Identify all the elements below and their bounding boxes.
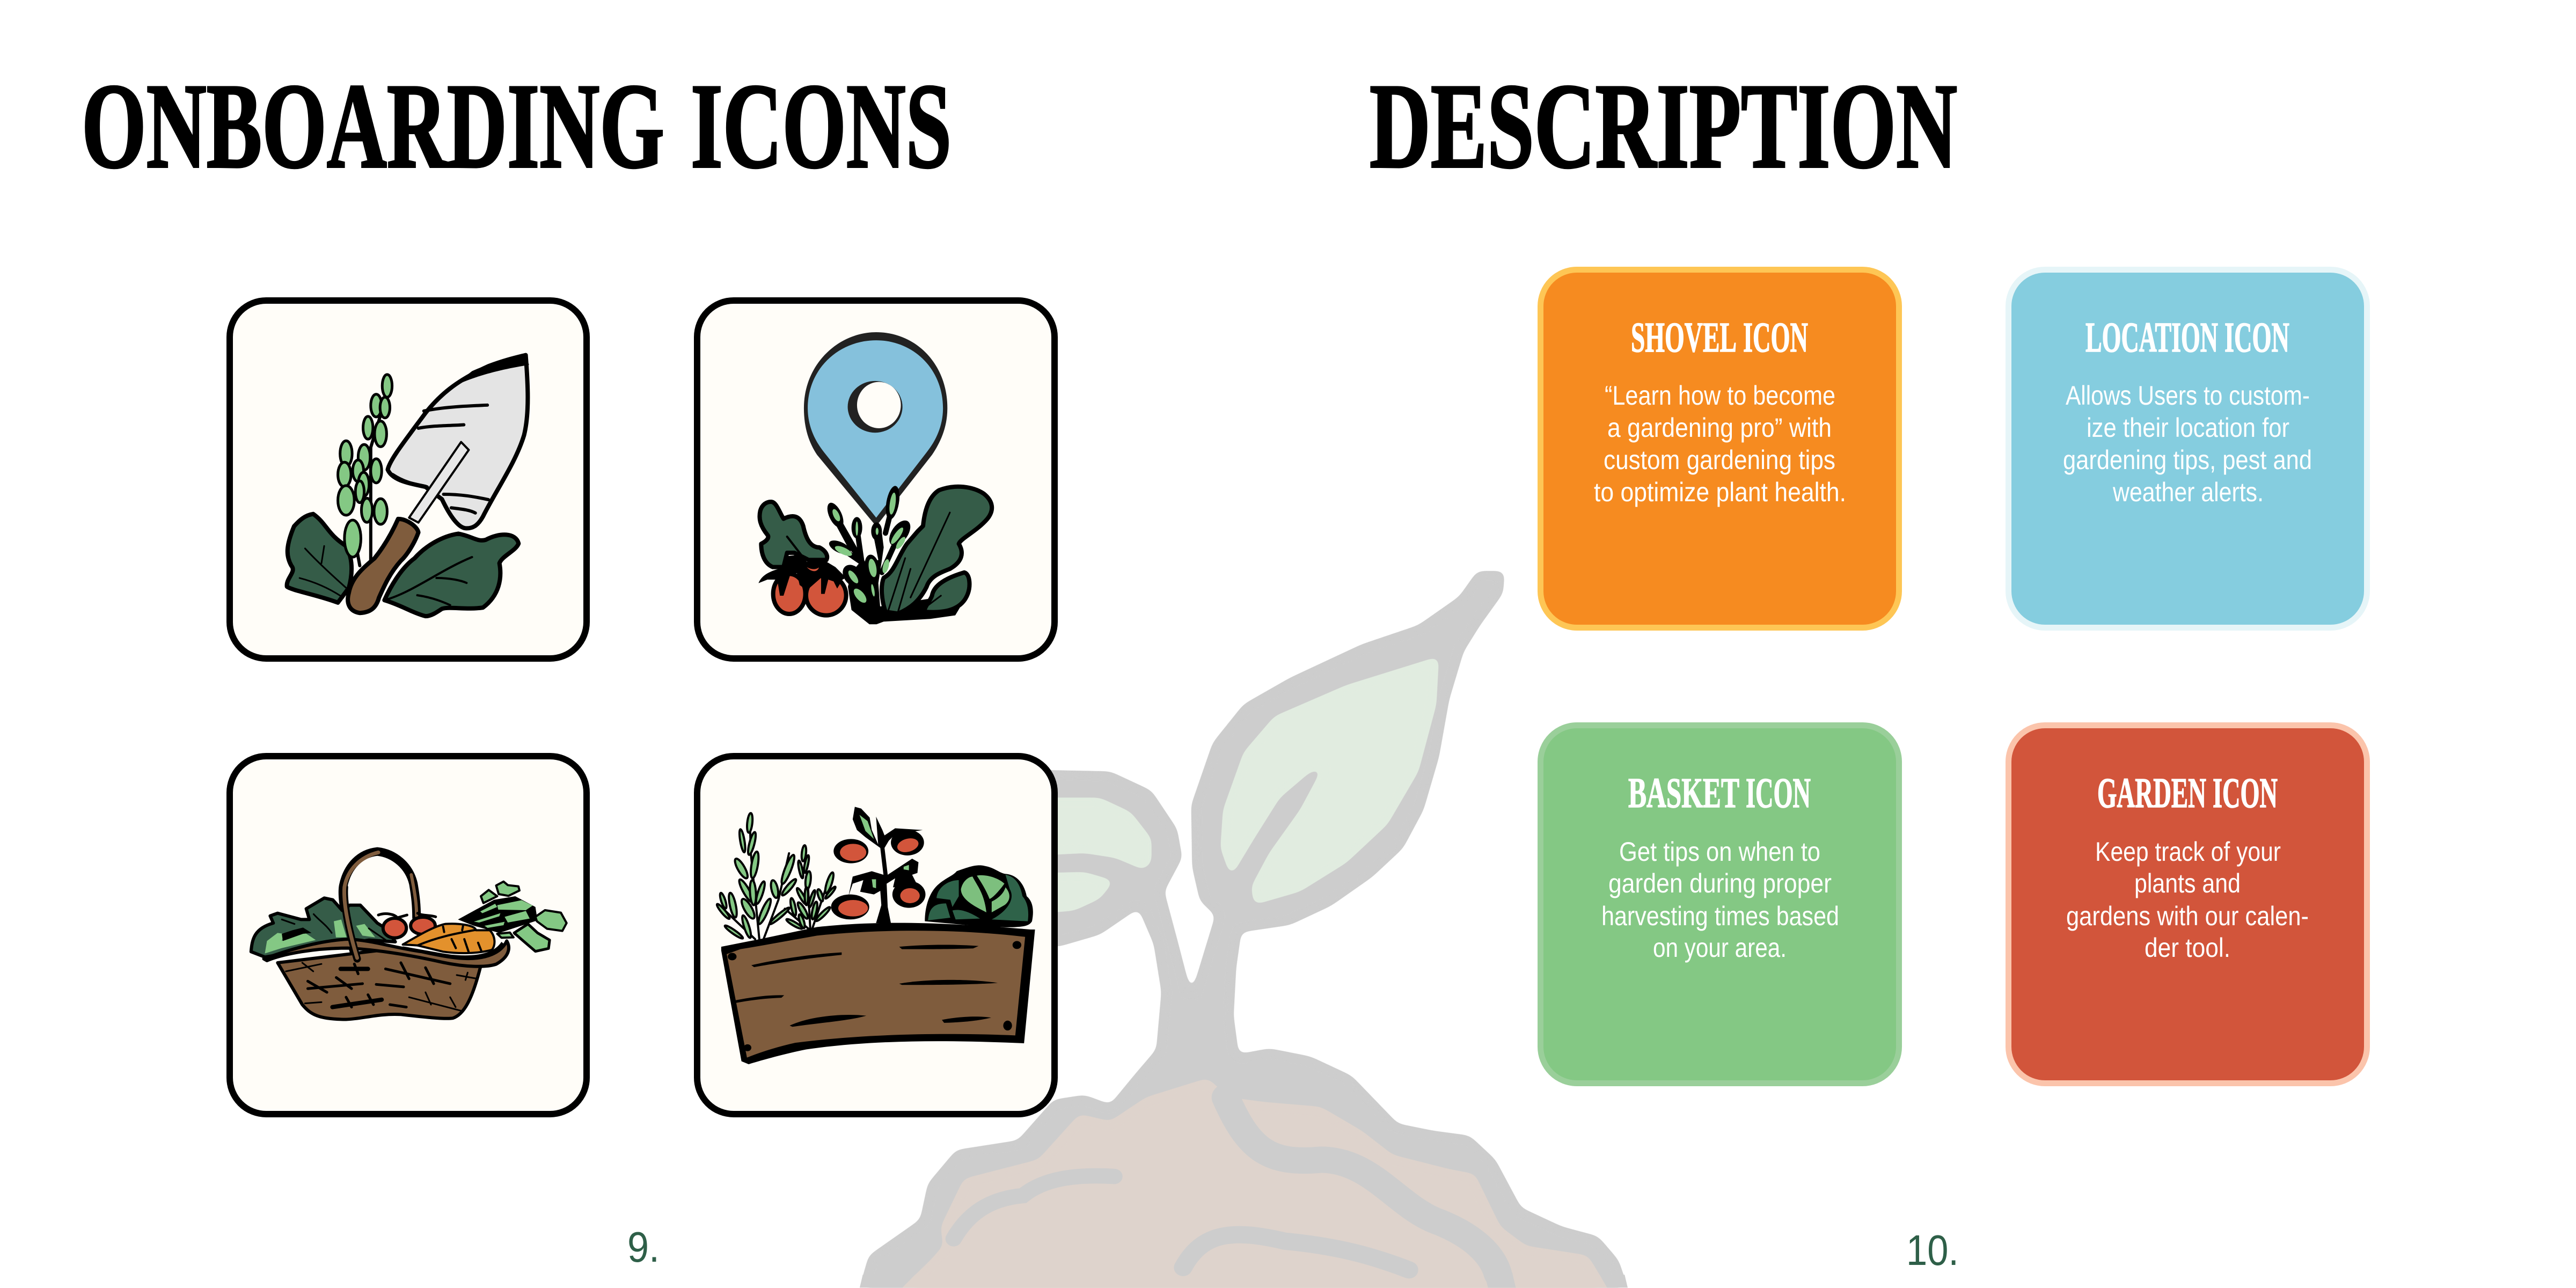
text: location description xyxy=(2063,380,2312,507)
text: garden description xyxy=(2066,837,2309,963)
plants: rosemary, tomato and cabbage xyxy=(715,807,1033,940)
panel: garden icon description xyxy=(2008,726,2367,1083)
basket body xyxy=(277,950,480,1019)
title: description: DESCRIPTION xyxy=(1370,59,1957,194)
text: location description: weather alerts. xyxy=(2112,477,2264,507)
heading: basket icon: BASKET xyxy=(1628,770,1739,817)
text: basket description xyxy=(1601,837,1839,963)
text: location description: gardening tips, pest and xyxy=(2063,445,2312,475)
text: shovel description: a gardening pro” with xyxy=(1607,413,1832,443)
text: shovel description: “Learn how to become xyxy=(1605,380,1835,411)
tomato plant xyxy=(848,807,923,923)
heading: shovel icon: ICON xyxy=(1743,314,1808,361)
heading: garden icon: GARDEN xyxy=(2097,770,2206,817)
panel: location icon description xyxy=(2008,269,2367,628)
text: shovel description xyxy=(1594,380,1846,507)
heading: shovel icon: SHOVEL xyxy=(1631,314,1737,361)
text: garden description: der tool. xyxy=(2145,933,2230,963)
shaft xyxy=(409,442,469,523)
text: location description: ize their location for xyxy=(2087,413,2289,443)
text: garden description: gardens with our calen- xyxy=(2066,901,2309,931)
blade xyxy=(387,355,528,528)
panel: basket icon tile xyxy=(230,756,587,1114)
icon: tomatoes and leafy plants xyxy=(758,485,992,624)
cabbage xyxy=(925,865,1033,927)
text: shovel description: custom gardening tips xyxy=(1604,445,1835,475)
title: onboarding icons: ONBOARDING xyxy=(82,59,664,194)
page number 9: 9. xyxy=(627,1223,660,1271)
text: garden description: plants and xyxy=(2134,868,2241,898)
text: basket description: on your area. xyxy=(1653,933,1787,963)
icon: location pin xyxy=(804,332,947,526)
icon: shovel with leaves xyxy=(287,354,529,616)
icon: basket of vegetables xyxy=(251,852,567,1019)
text: shovel description: to optimize plant health. xyxy=(1594,477,1846,507)
heading: location icon: LOCATION xyxy=(2085,314,2218,361)
heading: basket icon: ICON xyxy=(1746,770,1811,817)
panel: location icon tile xyxy=(697,301,1055,658)
background plant watermark xyxy=(860,571,1628,1287)
sprig xyxy=(338,375,392,566)
panel: basket icon description xyxy=(1540,726,1899,1083)
text: garden description: Keep track of your xyxy=(2095,837,2281,867)
basket contents and handle xyxy=(251,852,567,959)
icon: raised garden bed xyxy=(715,807,1035,1064)
panel: garden icon tile xyxy=(697,756,1055,1114)
panel: shovel icon description xyxy=(1540,269,1899,628)
carrot xyxy=(403,924,494,953)
text: location description: Allows Users to custom- xyxy=(2066,380,2310,411)
heading: garden icon: ICON xyxy=(2213,770,2278,817)
page number 10: 10. xyxy=(1906,1226,1959,1274)
wooden planter box xyxy=(721,923,1035,1064)
panel: shovel icon tile xyxy=(230,301,587,658)
basket rim xyxy=(264,852,509,967)
title: onboarding icons: ICONS xyxy=(691,59,952,194)
handle xyxy=(348,519,419,613)
text: basket description: Get tips on when to xyxy=(1619,837,1820,867)
text: basket description: harvesting times based xyxy=(1601,901,1839,931)
heading: location icon: ICON xyxy=(2224,314,2289,361)
text: basket description: garden during proper xyxy=(1608,868,1832,898)
carrot greens xyxy=(458,896,538,933)
